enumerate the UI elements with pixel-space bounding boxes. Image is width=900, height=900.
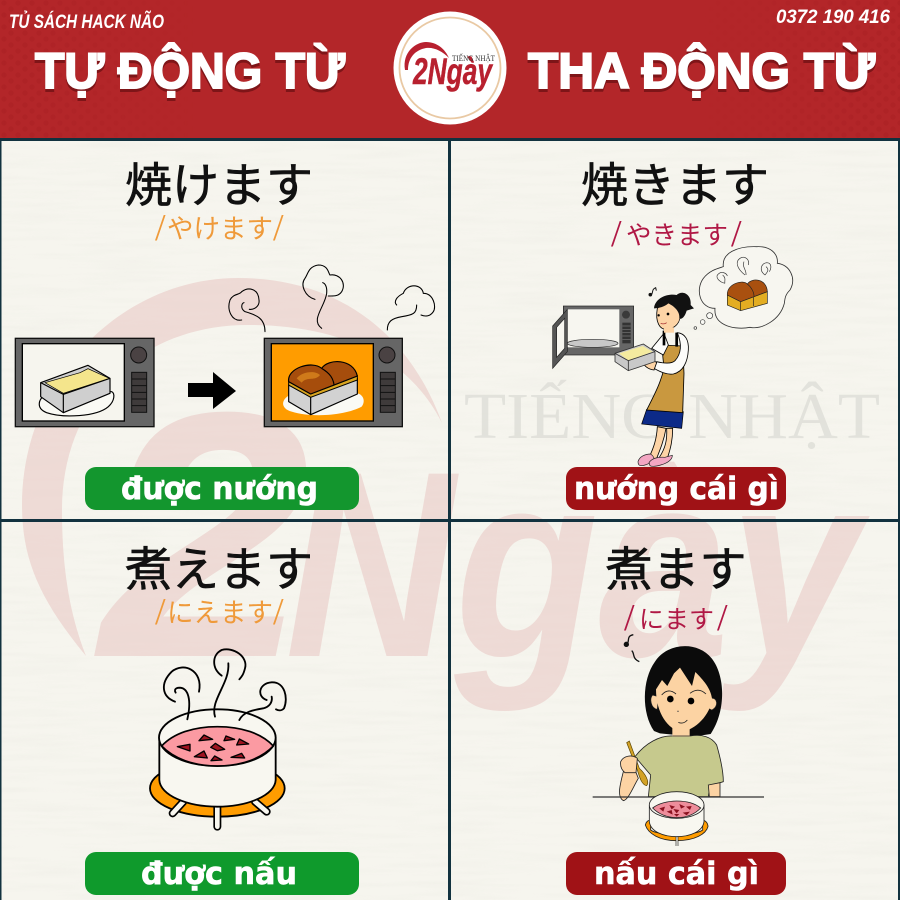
reading: やきます: やきます <box>626 222 728 250</box>
reading: やけます: / <box>273 207 284 249</box>
label: được nấu: được nấu <box>141 856 297 892</box>
reading: やきます: / <box>731 213 742 255</box>
arrow <box>188 372 236 409</box>
word: 煮ます: 煮ます <box>606 543 746 596</box>
open microwave <box>553 306 634 368</box>
label: nấu cái gì: nấu cái gì <box>594 856 759 892</box>
series label: TỦ SÁCH HACK NÃO <box>9 11 164 33</box>
illustration: boiling pot <box>150 649 286 827</box>
word: 焼けます: 焼けます <box>125 159 313 212</box>
reading: やけます <box>155 207 284 249</box>
woman <box>638 293 694 466</box>
heading: Tha động từ: THA ĐỘNG TỪ <box>528 42 876 99</box>
reading: やきます: / <box>611 213 622 255</box>
face <box>672 727 690 737</box>
label: nấu cái gì <box>566 852 786 895</box>
panel: bottom left 煮えます <box>85 543 359 895</box>
steam clouds <box>229 265 435 332</box>
panel: top left 焼けます <box>15 159 435 510</box>
reading: にえます: / <box>273 591 284 633</box>
illustration: baked bread in microwave <box>264 338 402 427</box>
label: được nướng <box>85 467 359 510</box>
reading: やけます: やけます <box>167 214 273 244</box>
illustration: girl cooking <box>593 635 764 846</box>
reading: やきます <box>611 213 742 255</box>
reading: にえます: / <box>155 591 166 633</box>
reading: やけます: / <box>155 207 166 249</box>
reading: にます: にます <box>639 606 714 634</box>
watermark: 2Ngày logo <box>22 278 873 731</box>
bread tray <box>615 344 655 371</box>
reading: にます: / <box>624 597 635 639</box>
panel: top right 焼きます <box>553 159 793 510</box>
label: được nướng: được nướng <box>121 471 318 507</box>
logo badge: 2Ngày <box>412 51 494 92</box>
label: được nấu <box>85 852 359 895</box>
illustration: woman baking bread <box>553 247 793 466</box>
spoon and hand <box>627 741 648 786</box>
header band <box>0 0 900 139</box>
panel: bottom right 煮ます <box>566 543 786 895</box>
reading: にます <box>624 597 728 639</box>
illustration: raw bread in microwave <box>15 338 154 427</box>
word: 煮えます: 煮えます <box>125 543 313 596</box>
heading: Tha động từ: THA ĐỘNG TỪ <box>528 45 876 102</box>
music note <box>624 635 639 662</box>
small pot <box>645 792 708 846</box>
logo badge: TIẾNG NHẬT <box>452 53 496 63</box>
hair back <box>645 646 722 737</box>
reading: にえます: にえます <box>167 598 273 628</box>
thought bubble <box>694 247 793 329</box>
label: nướng cái gì: nướng cái gì <box>574 471 779 507</box>
heading: Tự động từ: TỰ ĐỘNG TỪ <box>35 42 345 99</box>
reading: にます: / <box>717 597 728 639</box>
watermark: TIẾNG NHẬT: TIẾNG NHẬT <box>464 379 880 453</box>
word: 焼きます: 焼きます <box>581 159 769 212</box>
watermark: 2Ngày logo: 2 <box>94 340 310 731</box>
logo badge <box>394 12 506 124</box>
shirt and arm <box>635 735 723 797</box>
reading: にえます <box>155 591 284 633</box>
music note <box>649 288 656 296</box>
phone number: 0372 190 416 <box>776 7 890 28</box>
table line <box>593 795 764 799</box>
heading: Tự động từ: TỰ ĐỘNG TỪ <box>35 45 345 102</box>
